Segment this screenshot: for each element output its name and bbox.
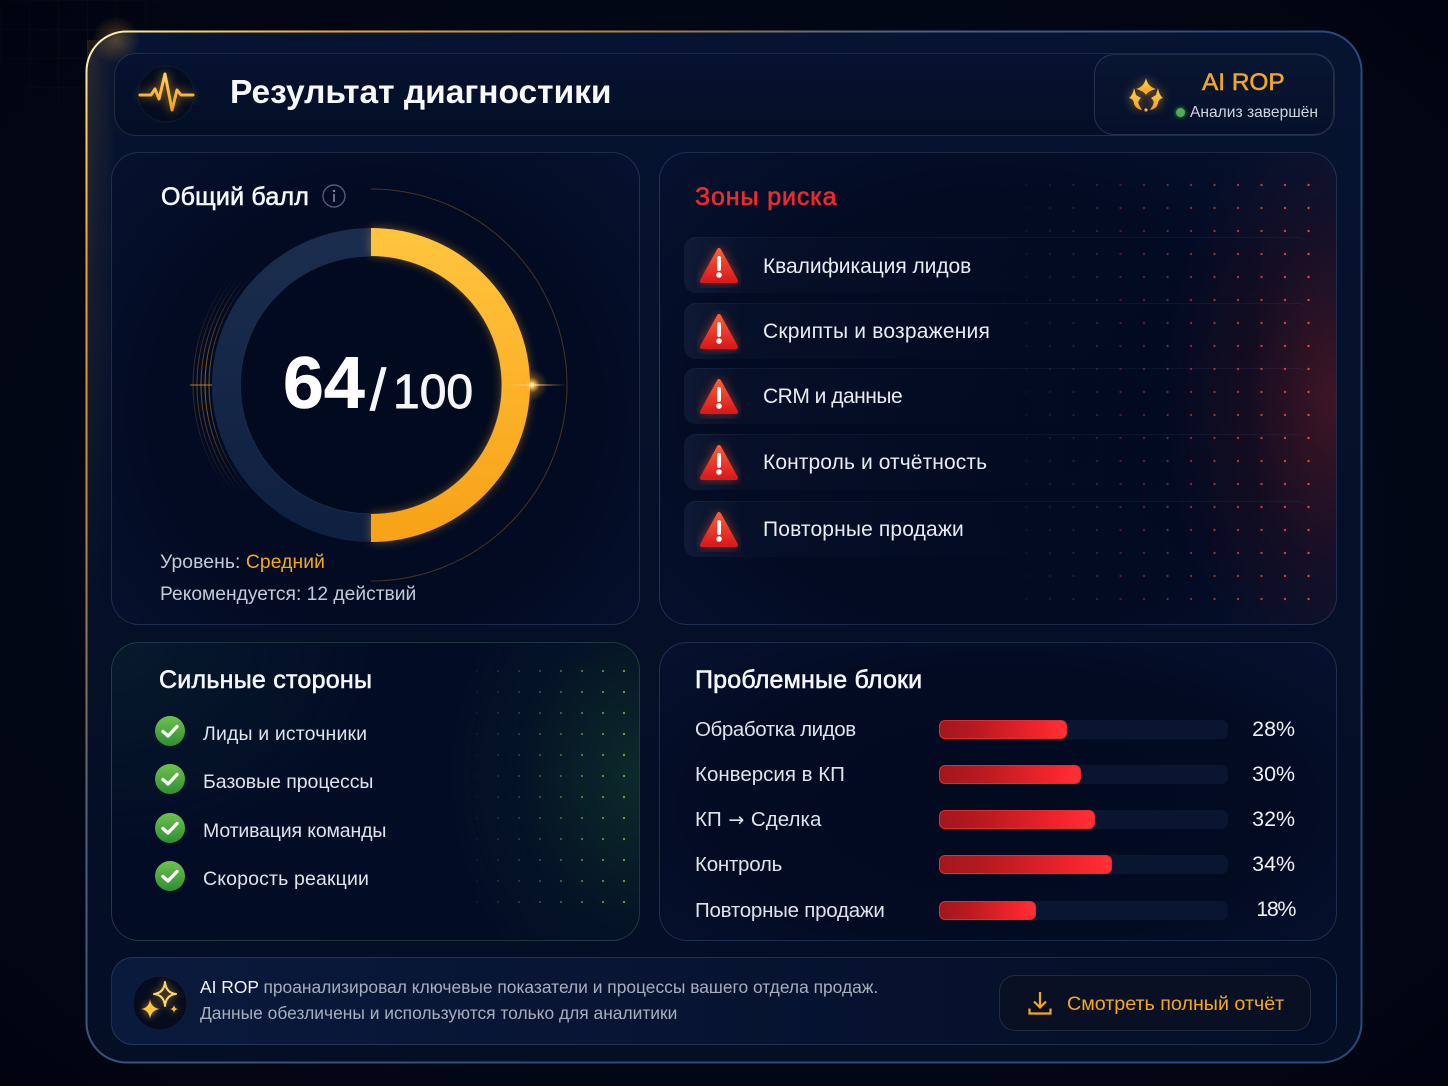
item label: CRM и данные	[763, 385, 902, 408]
header bar	[114, 53, 1335, 136]
heading: strengths: Сильные стороны	[159, 666, 372, 694]
line one: AI ROP проанализировал ключевые показатели и процессы вашего отдела продаж.	[200, 977, 878, 997]
bar track	[939, 810, 1228, 829]
bar row: lead processing 28%	[695, 717, 1295, 741]
item label: Скорость реакции	[203, 868, 369, 890]
risk item: lead qualification	[684, 237, 1310, 293]
icon: check	[155, 861, 185, 891]
bar row: proposal to deal 32%	[695, 807, 1295, 831]
item label: Контроль и отчётность	[763, 451, 987, 474]
badge name: AI ROP	[1202, 69, 1285, 96]
bar track	[939, 720, 1228, 739]
bar row: control 34%	[695, 852, 1295, 876]
recommendation line: Рекомендуется: 12 действий	[160, 584, 416, 605]
risk item: scripts and objections	[684, 303, 1310, 359]
item label: Мотивация команды	[203, 820, 386, 842]
gauge value	[283, 341, 473, 424]
icon: info	[322, 184, 346, 208]
icon: warning	[697, 244, 741, 288]
bar value: 28%	[1252, 717, 1295, 741]
bar value: 32%	[1252, 807, 1295, 831]
bar track	[939, 765, 1228, 784]
title: Результат диагностики	[230, 74, 612, 111]
gauge value: 100	[393, 366, 473, 419]
badge: AI ROP status	[1094, 54, 1334, 135]
strength item: reaction speed	[155, 861, 369, 891]
gauge value: 64	[283, 341, 365, 424]
button: view full report	[999, 975, 1311, 1031]
risk item: control and reporting	[684, 434, 1310, 490]
bar label: Конверсия в КП	[695, 763, 845, 786]
footer bar	[111, 957, 1337, 1045]
bar track	[939, 855, 1228, 874]
icon: warning	[697, 310, 741, 354]
bar track	[939, 901, 1228, 920]
icon: download	[1028, 992, 1052, 1015]
strength item: team motivation	[155, 813, 386, 843]
strength item: leads and sources	[155, 716, 367, 746]
bar label: Обработка лидов	[695, 718, 856, 741]
strength item: base processes	[155, 764, 373, 794]
icon: warning	[697, 508, 741, 552]
bar row: conversion to proposal 30%	[695, 762, 1295, 786]
glare on arc tip	[516, 369, 548, 401]
bar label: КП → Сделка	[695, 808, 821, 831]
panel: risk zones	[659, 152, 1337, 625]
line two: Данные обезличены и используются только для аналитики	[200, 1003, 677, 1023]
gauge chart: 64 of 100	[190, 188, 568, 582]
panel: overall score	[111, 152, 640, 625]
risk item: CRM and data	[684, 368, 1310, 424]
icon: check	[155, 716, 185, 746]
panel: problem blocks	[659, 642, 1337, 941]
level line: Уровень: Средний	[160, 552, 325, 573]
item label: Скрипты и возражения	[763, 320, 990, 343]
panel: strengths	[111, 642, 640, 941]
bar value: 34%	[1252, 852, 1295, 876]
bar label: Контроль	[695, 853, 782, 876]
status dot	[1176, 108, 1185, 117]
item label: Повторные продажи	[763, 518, 964, 541]
footer text	[200, 977, 878, 1023]
bar row: repeat sales 18%	[695, 897, 1296, 922]
bar value: 30%	[1252, 762, 1295, 786]
icon: check	[155, 764, 185, 794]
bar label: Повторные продажи	[695, 899, 885, 922]
button label: Смотреть полный отчёт	[1067, 993, 1284, 1015]
icon: warning	[697, 375, 741, 419]
item label: Квалификация лидов	[763, 255, 971, 278]
bar value: 18%	[1256, 897, 1295, 921]
risk item: repeat sales	[684, 501, 1310, 557]
icon: pulse	[135, 66, 198, 122]
status text: Анализ завершён	[1190, 104, 1318, 121]
icon: sparkles	[132, 976, 188, 1030]
gauge value: /	[370, 358, 387, 423]
heading: problem blocks: Проблемные блоки	[695, 666, 922, 694]
heading: overall score: Общий балл	[161, 183, 309, 211]
icon: warning	[697, 441, 741, 485]
icon: check	[155, 813, 185, 843]
item label: Лиды и источники	[203, 723, 367, 745]
item label: Базовые процессы	[203, 771, 373, 793]
icon: AI star emblem	[1124, 76, 1168, 115]
heading: risk zones: Зоны риска	[695, 183, 837, 211]
